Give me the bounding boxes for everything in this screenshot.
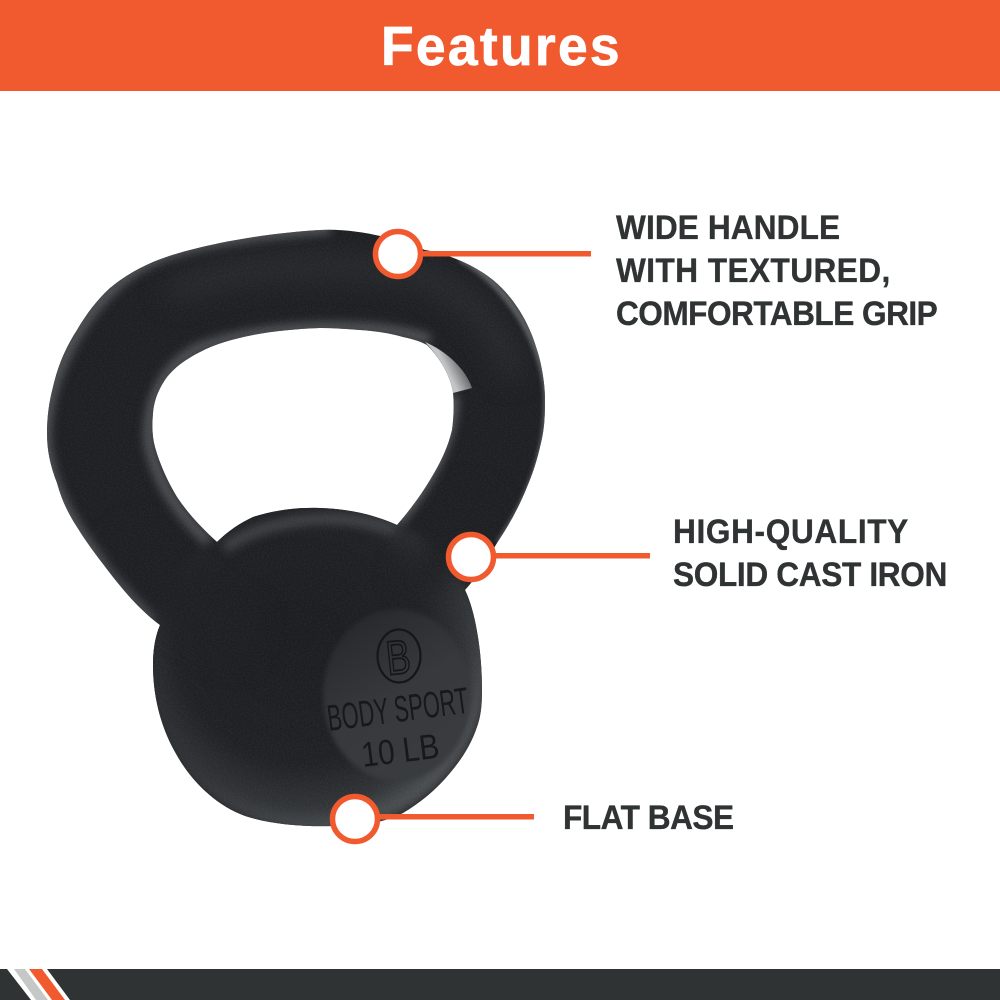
header banner	[0, 0, 1000, 91]
handle inner rim light	[149, 327, 430, 545]
kettlebell photo	[47, 230, 545, 826]
leader line	[377, 814, 534, 820]
handle outer rim light	[45, 228, 330, 625]
ball top sheen	[225, 519, 395, 548]
ball body	[148, 504, 488, 832]
footer bar	[0, 969, 1000, 1000]
label: FLAT BASE	[563, 798, 734, 836]
handle top shine	[170, 266, 515, 375]
flat face medallion	[323, 609, 471, 781]
label	[673, 512, 947, 593]
marker	[332, 796, 378, 842]
leader line	[493, 553, 650, 558]
title: Features	[381, 16, 620, 77]
marker	[376, 232, 420, 276]
footer stripes	[7, 969, 70, 1000]
brand emboss: BODY SPORT	[325, 680, 471, 739]
label	[616, 208, 938, 332]
logo badge: B	[384, 631, 413, 686]
label: WIDE HANDLE	[616, 208, 840, 246]
label: COMFORTABLE GRIP	[616, 294, 938, 332]
surface grain	[48, 230, 544, 825]
marker	[448, 534, 494, 580]
handle right rim	[460, 258, 547, 543]
callout: cast iron	[448, 512, 947, 593]
label: HIGH-QUALITY	[673, 512, 908, 550]
callout: wide handle	[376, 208, 938, 332]
neck join shadow	[103, 561, 154, 620]
callout: flat base	[332, 796, 734, 842]
leader line	[420, 251, 591, 256]
label: SOLID CAST IRON	[673, 555, 947, 593]
weight emboss: 10 LB	[359, 727, 441, 775]
label: WITH TEXTURED,	[616, 251, 890, 289]
grip hollow highlight	[425, 342, 472, 393]
